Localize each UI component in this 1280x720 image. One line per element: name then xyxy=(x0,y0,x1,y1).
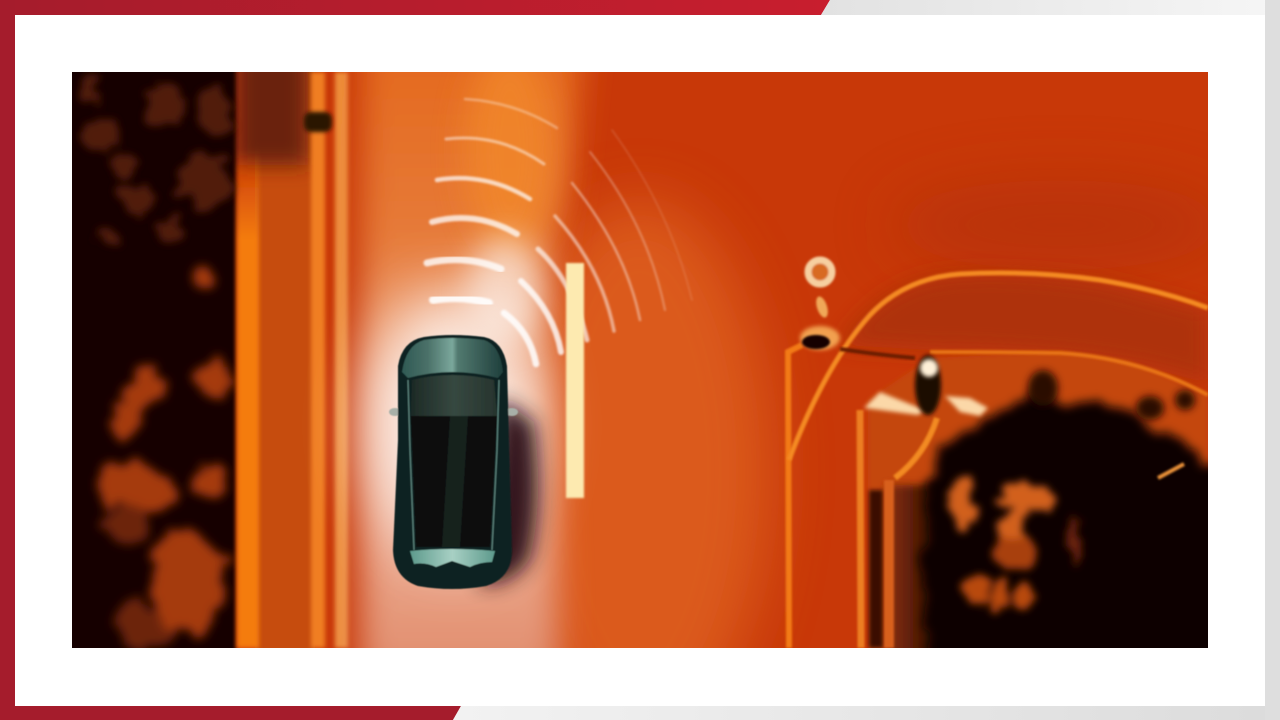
left kerb lines xyxy=(237,72,348,648)
right: garden area xyxy=(868,354,1208,490)
roadside object xyxy=(304,112,332,132)
radar waves: front xyxy=(427,99,557,303)
right: garden left fade xyxy=(883,480,937,648)
right: dark strip xyxy=(869,490,883,648)
car xyxy=(389,335,518,589)
left hedge xyxy=(60,60,236,660)
upper lamp base glow xyxy=(800,326,840,350)
pale glow around car xyxy=(367,290,537,560)
upper right darker tone xyxy=(926,187,1194,263)
lamp posts xyxy=(800,260,941,415)
warm road tone xyxy=(544,186,784,648)
right: road edge lines xyxy=(788,345,802,648)
frame: top red bar xyxy=(0,0,830,15)
frame: bottom red bar xyxy=(0,706,461,720)
right: dark blobs on top of garden xyxy=(1028,370,1195,420)
hood xyxy=(402,338,503,378)
upper lamp stem xyxy=(814,295,830,319)
bright kerb highlights xyxy=(864,392,988,416)
frame: left red bar xyxy=(0,0,15,720)
right: dark shrub xyxy=(913,388,1208,648)
upper lamp ring xyxy=(808,260,832,284)
lower lamp light xyxy=(920,359,938,377)
right: kerb curve and lines xyxy=(789,273,1208,648)
frame: top grey bar xyxy=(821,0,1280,15)
lower lamp post shadow xyxy=(915,355,941,415)
cabin reflection xyxy=(442,416,468,547)
radar waves: side xyxy=(504,130,692,364)
upper verge shading xyxy=(236,40,308,165)
mirrors xyxy=(389,408,401,416)
right: lit shrub patches xyxy=(948,478,1081,612)
upper lamp base xyxy=(802,335,830,349)
sensor beam xyxy=(360,40,585,680)
bright orange beam core xyxy=(465,45,555,255)
right: dark wire xyxy=(840,349,915,358)
dark cabin glass xyxy=(411,416,497,547)
rear glass xyxy=(410,549,495,567)
right: verge between curves xyxy=(840,273,1208,385)
side trim lines xyxy=(408,380,499,550)
left verge xyxy=(255,72,315,648)
frame: bottom grey bar xyxy=(453,706,1265,720)
road surface xyxy=(232,72,1208,648)
photo panel: car sensing scene xyxy=(72,72,1208,648)
obstacle bar xyxy=(566,263,584,498)
pale glow ahead of car xyxy=(467,235,543,345)
body xyxy=(393,335,512,589)
frame: right grey bar xyxy=(1265,0,1280,720)
car shadow xyxy=(480,398,538,585)
windscreen xyxy=(411,375,497,416)
